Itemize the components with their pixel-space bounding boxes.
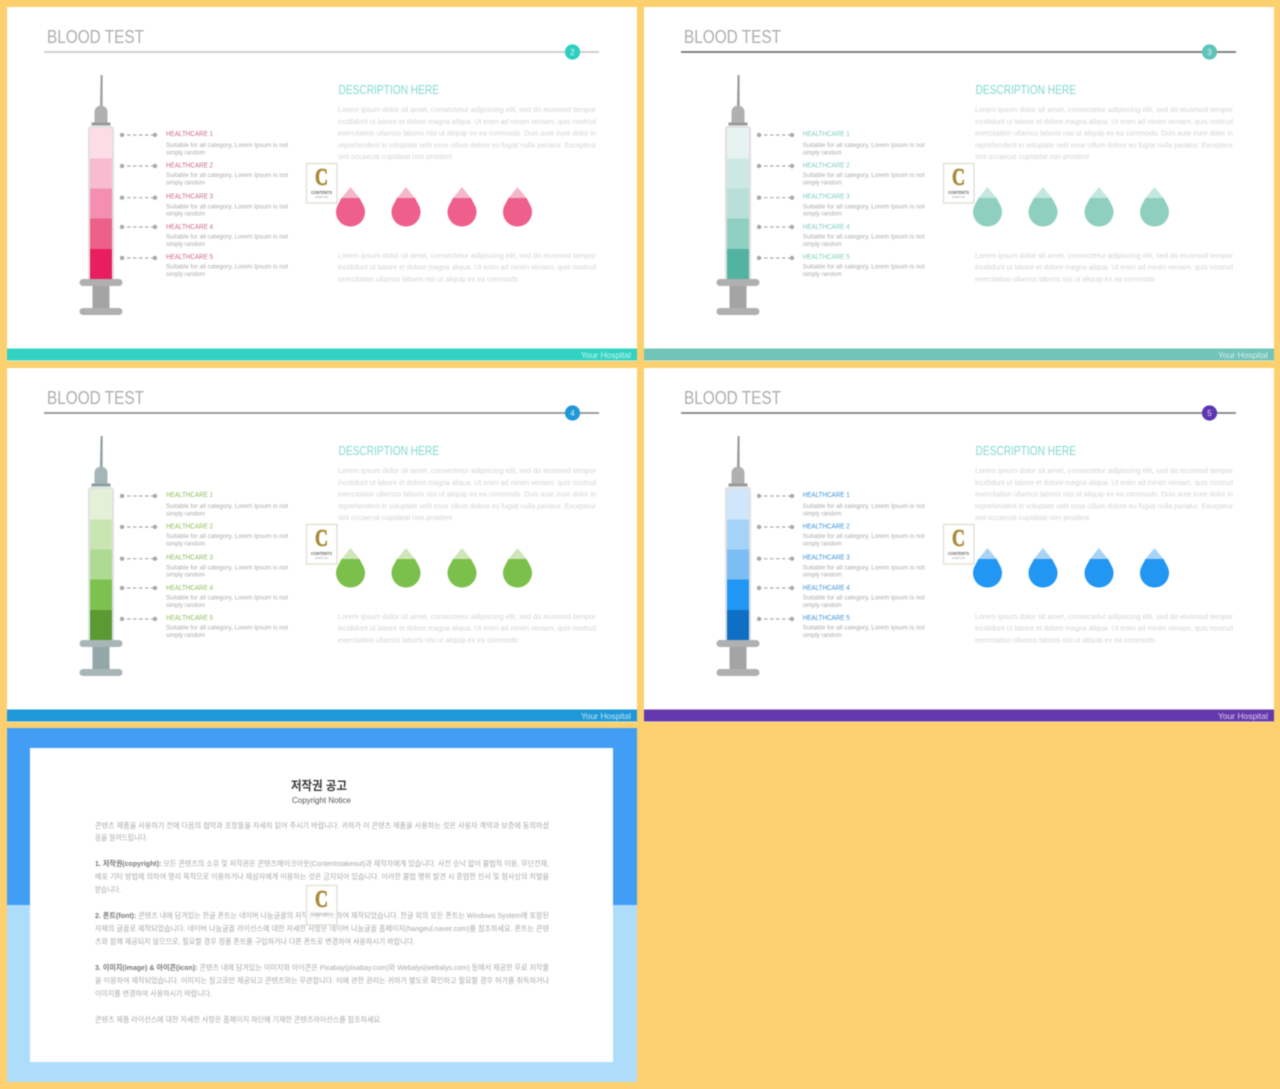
- text block: upper paragraph: incididunt ut labore et dolore magna aliqua. Ut enim ad minim veniam, quis nostrud: [975, 119, 1233, 126]
- callout: healthcare 2: [120, 524, 288, 548]
- footer bar: [644, 710, 1274, 722]
- callout: healthcare 2: HEALTHCARE 2: [803, 524, 850, 530]
- text block: upper paragraph: Lorem ipsum dolor sit amet, consectetur adipiscing elit, sed do eiusmod tempor: [338, 468, 597, 475]
- logo: contents: [306, 886, 337, 925]
- text block: clause 2: 자체의 글꼴로 제작되었습니다. 네이버 나눔글꼴 라이선스에 대한 자세한 사항은 네이버 나눔글꼴 홈페이지(hangeul.naver.com)를 참조하세요. 폰트는 콘텐: [95, 923, 549, 933]
- logo: contents: [306, 164, 337, 203]
- text block: upper paragraph: Lorem ipsum dolor sit amet, consectetur adipiscing elit, sed do eiusmod tempor: [338, 107, 597, 114]
- callout: healthcare 5: [757, 615, 925, 639]
- text block: upper paragraph: [338, 468, 597, 522]
- text block: lower paragraph: Lorem ipsum dolor sit amet, consectetur adipiscing elit, sed do eiusmod tempor: [975, 253, 1234, 260]
- callout: healthcare 2: [757, 162, 925, 186]
- text block: clause 3: 이미지를 변경하여 사용하시기 바랍니다.: [95, 988, 212, 998]
- callout: healthcare 1: Suitable for all category, Lorem Ipsum is not: [803, 504, 925, 510]
- callout: healthcare 3: simply random: [803, 572, 842, 578]
- callout: healthcare 1: HEALTHCARE 1: [166, 492, 213, 499]
- text block: intro: 콘텐츠 제품을 사용하기 전에 다음의 협약과 조항들을 자세히 읽어 주시기 바랍니다. 귀하가 이 콘텐츠 제품을 사용하는 것은 사용자 계약과 보증에 동의하셨: [95, 820, 549, 830]
- page number badge: [565, 44, 580, 60]
- panel: slide 5 blue: [644, 368, 1274, 722]
- callout: healthcare 1: Suitable for all category, Lorem Ipsum is not: [166, 504, 288, 510]
- icons: blood drops: [973, 548, 1169, 587]
- logo: contents: C: [952, 526, 965, 552]
- callout: healthcare 2: simply random: [803, 542, 842, 548]
- callout: healthcare 4: HEALTHCARE 4: [803, 224, 850, 231]
- callout: healthcare 3: Suitable for all category, Lorem Ipsum is not: [803, 566, 925, 572]
- callout: healthcare 5: HEALTHCARE 5: [166, 615, 213, 622]
- callout: healthcare 1: [120, 131, 288, 156]
- text block: lower paragraph: exercitation ullamco laboris nisi ut aliquip ex ea commodo: [338, 277, 518, 284]
- page number badge: 2: [570, 48, 575, 57]
- text block: clause 3: 을 이용하여 제작되었습니다. 이미지는 참고로만 제공되고 콘텐츠와는 무관합니다. 이에 관한 권리는 귀하가 별도로 확인하고 필요할 경우 허가를 취득하거나: [95, 975, 549, 985]
- text block: lower paragraph: [975, 253, 1234, 284]
- page number badge: 4: [570, 409, 575, 418]
- logo: contents: CONTENTS: [311, 551, 332, 556]
- page number badge: 5: [1207, 409, 1212, 418]
- callout: healthcare 5: simply random: [803, 272, 842, 278]
- callout: healthcare 3: [757, 554, 925, 578]
- logo: contents: CONTENTS: [311, 912, 332, 917]
- callout: healthcare 5: [120, 254, 288, 278]
- text block: upper paragraph: exercitation ullamco laboris nisi ut aliquip ex ea commodo. Duis aute irure dolor in: [338, 131, 596, 138]
- heading: blood test: BLOOD TEST: [684, 388, 781, 408]
- footer bar: Your Hospital: [1218, 711, 1268, 721]
- callout: healthcare 3: Suitable for all category, Lorem Ipsum is not: [166, 566, 288, 572]
- text block: lower paragraph: [338, 614, 597, 645]
- heading: blood test: BLOOD TEST: [47, 27, 144, 47]
- callout: healthcare 5: simply random: [166, 272, 205, 278]
- text block: lower paragraph: [975, 614, 1234, 645]
- text block: clause 3: 3. 이미지(image) & 아이콘(icon): 콘텐츠 내에 담겨있는 이미지와 아이콘은 Pixabay(pixabay.com)와 Webalys(webalys.com) 등에서 제공한 무료 저작물: [95, 962, 549, 972]
- callout: healthcare 4: Suitable for all category, Lorem Ipsum is not: [803, 235, 925, 241]
- text block: clause 2: 츠와 함께 제공되지 않으므로, 필요할 경우 정품 폰트를 구입하거나 다른 폰트로 변경하여 사용하시기 바랍니다.: [95, 936, 415, 946]
- icon: syringe: [716, 436, 760, 676]
- callout: healthcare 5: HEALTHCARE 5: [166, 254, 213, 261]
- text block: lower paragraph: exercitation ullamco laboris nisi ut aliquip ex ea commodo: [975, 638, 1155, 645]
- text block: upper paragraph: sint occaecat cupidatat non proident: [975, 515, 1089, 522]
- callout: healthcare 1: [120, 492, 288, 518]
- callout: healthcare 3: [120, 194, 288, 218]
- callout: healthcare 2: HEALTHCARE 2: [166, 162, 213, 170]
- callout: healthcare 4: [757, 585, 925, 609]
- logo: contents: CONTENTS: [311, 190, 332, 195]
- callout: healthcare 4: simply random: [166, 242, 205, 248]
- text block: upper paragraph: exercitation ullamco laboris nisi ut aliquip ex ea commodo. Duis aute irure dolor in: [338, 492, 596, 499]
- callout: healthcare 5: simply random: [803, 633, 842, 639]
- callout: healthcare 2: simply random: [803, 180, 842, 186]
- logo: contents: C: [315, 526, 328, 552]
- text block: upper paragraph: exercitation ullamco laboris nisi ut aliquip ex ea commodo. Duis aute irure dolor in: [975, 492, 1233, 499]
- text block: lower paragraph: incididunt ut labore et dolore magna aliqua. Ut enim ad minim veniam, quis nostrud: [338, 265, 596, 272]
- callout: healthcare 5: Suitable for all category, Lorem Ipsum is not: [166, 626, 288, 632]
- text block: clause 2: 2. 폰트(font): 콘텐츠 내에 담겨있는 한글 폰트는 네이버 나눔글꼴의 저작권을 기초하여 제작되었습니다. 한글 외의 모든 폰트는 Windows System에 포함된: [95, 910, 549, 920]
- logo: contents: NAVER.COM: [952, 195, 966, 199]
- callout: healthcare 1: Suitable for all category, Lorem Ipsum is not: [166, 143, 288, 149]
- page number badge: [1202, 405, 1217, 421]
- text block: clause 1: 받습니다.: [95, 884, 121, 894]
- callout: healthcare 5: Suitable for all category, Lorem Ipsum is not: [803, 265, 925, 271]
- callout: healthcare 5: [120, 615, 288, 639]
- logo: contents: C: [315, 887, 328, 913]
- heading: description: DESCRIPTION HERE: [976, 83, 1076, 97]
- logo: contents: NAVER.COM: [315, 556, 329, 560]
- text block: upper paragraph: reprehenderit in voluptate velit esse cillum dolore eu fugiat nulla pariatur. Excepteur: [975, 143, 1234, 150]
- callout: healthcare 2: Suitable for all category, Lorem Ipsum is not: [803, 534, 925, 540]
- text block: clause 1: 1. 저작권(copyright): 모든 콘텐츠의 소유 및 저작권은 콘텐츠메이크아웃(Contentstakeout)과 제작자에게 있습니다. 사전 승낙 없이 불법적 이용, 무단전재,: [95, 858, 549, 868]
- text block: lower paragraph: incididunt ut labore et dolore magna aliqua. Ut enim ad minim veniam, quis nostrud: [975, 626, 1233, 633]
- callout: healthcare 1: simply random: [166, 512, 205, 518]
- callout: healthcare 1: simply random: [166, 150, 205, 156]
- callout: healthcare 4: Suitable for all category, Lorem Ipsum is not: [803, 596, 925, 602]
- text block: lower paragraph: incididunt ut labore et dolore magna aliqua. Ut enim ad minim veniam, quis nostrud: [338, 626, 596, 633]
- footer bar: [7, 348, 637, 360]
- callout: healthcare 2: [757, 524, 925, 548]
- text block: upper paragraph: [975, 468, 1234, 522]
- callout: healthcare 5: Suitable for all category, Lorem Ipsum is not: [166, 265, 288, 271]
- callout: healthcare 2: simply random: [166, 542, 205, 548]
- callout: healthcare 3: HEALTHCARE 3: [166, 194, 213, 200]
- logo: contents: NAVER.COM: [315, 195, 329, 199]
- footer bar: [7, 710, 637, 722]
- panel: slide 2 pink: [7, 7, 637, 361]
- footer bar: Your Hospital: [581, 350, 631, 360]
- heading: description: DESCRIPTION HERE: [338, 444, 439, 458]
- callout: healthcare 1: [757, 492, 925, 518]
- logo: contents: [944, 164, 974, 203]
- text block: lower paragraph: incididunt ut labore et dolore magna aliqua. Ut enim ad minim veniam, quis nostrud: [975, 265, 1233, 272]
- text block: upper paragraph: sint occaecat cupidatat non proident: [338, 154, 452, 161]
- page number badge: [565, 405, 580, 421]
- callout: healthcare 5: [757, 254, 925, 278]
- logo: contents: [944, 524, 974, 564]
- text block: clause 1: [95, 858, 549, 894]
- text block: lower paragraph: Lorem ipsum dolor sit amet, consectetur adipiscing elit, sed do eiusmod tempor: [975, 614, 1234, 621]
- panel: slide 4 green: [7, 368, 637, 722]
- callout: healthcare 2: HEALTHCARE 2: [803, 162, 850, 170]
- callout: healthcare 3: HEALTHCARE 3: [803, 554, 850, 562]
- callout: healthcare 1: Suitable for all category, Lorem Ipsum is not: [803, 143, 925, 149]
- text block: closing note: 콘텐츠 제품 라이선스에 대한 자세한 사항은 홈페이지 하단에 기재한 콘텐츠라이선스를 참조하세요.: [95, 1014, 382, 1024]
- text block: clause 3: [95, 962, 549, 998]
- logo: contents: NAVER.COM: [952, 556, 966, 560]
- callout: healthcare 3: HEALTHCARE 3: [803, 194, 850, 200]
- text block: upper paragraph: [338, 107, 597, 161]
- callout: healthcare 3: Suitable for all category, Lorem Ipsum is not: [166, 205, 288, 211]
- callout: healthcare 1: [757, 131, 925, 156]
- panel: slide 3 teal: [644, 7, 1274, 361]
- text block: upper paragraph: Lorem ipsum dolor sit amet, consectetur adipiscing elit, sed do eiusmod tempor: [975, 107, 1234, 114]
- heading: copyright title: 저작권 공고: [291, 778, 347, 793]
- callout: healthcare 2: HEALTHCARE 2: [166, 524, 213, 530]
- callout: healthcare 4: HEALTHCARE 4: [166, 585, 213, 592]
- text block: clause 2: [95, 910, 549, 946]
- text block: intro: 음을 알려드립니다.: [95, 832, 148, 842]
- logo: contents: C: [315, 165, 328, 191]
- text block: lower paragraph: [338, 253, 597, 284]
- icons: blood drops: [336, 548, 532, 587]
- callout: healthcare 3: simply random: [166, 212, 205, 218]
- callout: healthcare 4: [757, 224, 925, 248]
- callout: healthcare 4: simply random: [803, 242, 842, 248]
- heading: blood test: BLOOD TEST: [47, 388, 144, 408]
- logo: contents: [306, 524, 337, 564]
- callout: healthcare 1: simply random: [803, 512, 842, 518]
- callout: healthcare 4: simply random: [803, 603, 842, 609]
- callout: healthcare 3: simply random: [166, 572, 205, 578]
- text block: upper paragraph: reprehenderit in voluptate velit esse cillum dolore eu fugiat nulla pariatur. Excepteur: [975, 504, 1234, 511]
- callout: healthcare 5: HEALTHCARE 5: [803, 615, 850, 622]
- text block: upper paragraph: incididunt ut labore et dolore magna aliqua. Ut enim ad minim veniam, quis nostrud: [338, 119, 596, 126]
- callout: healthcare 5: Suitable for all category, Lorem Ipsum is not: [803, 626, 925, 632]
- callout: healthcare 3: HEALTHCARE 3: [166, 554, 213, 562]
- text block: intro: [95, 820, 549, 842]
- text block: upper paragraph: reprehenderit in voluptate velit esse cillum dolore eu fugiat nulla pariatur. Excepteur: [338, 143, 597, 150]
- heading: description: DESCRIPTION HERE: [976, 444, 1076, 458]
- page number badge: [1202, 44, 1217, 60]
- callout: healthcare 2: Suitable for all category, Lorem Ipsum is not: [803, 173, 925, 179]
- text block: upper paragraph: [975, 107, 1234, 161]
- logo: contents: C: [952, 165, 965, 191]
- icon: syringe: [80, 75, 122, 315]
- callout: healthcare 3: [120, 554, 288, 578]
- subheading: copyright notice: Copyright Notice: [292, 795, 351, 805]
- text block: upper paragraph: exercitation ullamco laboris nisi ut aliquip ex ea commodo. Duis aute irure dolor in: [975, 131, 1233, 138]
- callout: healthcare 4: Suitable for all category, Lorem Ipsum is not: [166, 235, 288, 241]
- icons: blood drops: [336, 187, 532, 226]
- callout: healthcare 4: Suitable for all category, Lorem Ipsum is not: [166, 596, 288, 602]
- icons: blood drops: [973, 187, 1169, 226]
- callout: healthcare 5: simply random: [166, 633, 205, 639]
- footer bar: Your Hospital: [1218, 350, 1268, 360]
- callout: healthcare 2: simply random: [166, 180, 205, 186]
- callout: healthcare 3: simply random: [803, 212, 842, 218]
- icon: syringe: [80, 436, 122, 676]
- callout: healthcare 1: HEALTHCARE 1: [166, 131, 213, 138]
- callout: healthcare 1: simply random: [803, 150, 842, 156]
- callout: healthcare 1: HEALTHCARE 1: [803, 492, 850, 499]
- callout: healthcare 4: [120, 585, 288, 609]
- callout: healthcare 3: [757, 194, 925, 218]
- callout: healthcare 4: HEALTHCARE 4: [803, 585, 850, 592]
- logo: contents: CONTENTS: [948, 190, 969, 195]
- text block: lower paragraph: Lorem ipsum dolor sit amet, consectetur adipiscing elit, sed do eiusmod tempor: [338, 253, 597, 260]
- text block: upper paragraph: incididunt ut labore et dolore magna aliqua. Ut enim ad minim veniam, quis nostrud: [338, 480, 596, 487]
- panel: copyright notice: [7, 728, 637, 1082]
- text block: upper paragraph: sint occaecat cupidatat non proident: [338, 515, 452, 522]
- heading: blood test: BLOOD TEST: [684, 27, 781, 47]
- callout: healthcare 2: Suitable for all category, Lorem Ipsum is not: [166, 173, 288, 179]
- callout: healthcare 5: HEALTHCARE 5: [803, 254, 850, 261]
- callout: healthcare 4: HEALTHCARE 4: [166, 224, 213, 231]
- callout: healthcare 3: Suitable for all category, Lorem Ipsum is not: [803, 205, 925, 211]
- callout: healthcare 2: [120, 162, 288, 186]
- icon: syringe: [716, 75, 760, 315]
- heading: description: DESCRIPTION HERE: [338, 83, 439, 97]
- text block: upper paragraph: Lorem ipsum dolor sit amet, consectetur adipiscing elit, sed do eiusmod tempor: [975, 468, 1234, 475]
- text block: upper paragraph: sint occaecat cupidatat non proident: [975, 154, 1089, 161]
- page number badge: 3: [1207, 48, 1212, 57]
- text block: clause 1: 배포 기타 방법에 의하여 영리 목적으로 이용하거나 제삼자에게 이용하는 것은 금지되어 있습니다. 이러한 불법 행위 발견 시 준엄한 민사 및 형사상의 처벌을: [95, 871, 549, 881]
- logo: contents: CONTENTS: [948, 551, 969, 556]
- text block: upper paragraph: incididunt ut labore et dolore magna aliqua. Ut enim ad minim veniam, quis nostrud: [975, 480, 1233, 487]
- callout: healthcare 4: simply random: [166, 603, 205, 609]
- text block: lower paragraph: exercitation ullamco laboris nisi ut aliquip ex ea commodo: [975, 277, 1155, 284]
- footer bar: Your Hospital: [581, 711, 631, 721]
- text block: lower paragraph: Lorem ipsum dolor sit amet, consectetur adipiscing elit, sed do eiusmod tempor: [338, 614, 597, 621]
- callout: healthcare 4: [120, 224, 288, 248]
- callout: healthcare 2: Suitable for all category, Lorem Ipsum is not: [166, 534, 288, 540]
- callout: healthcare 1: HEALTHCARE 1: [803, 131, 850, 138]
- text block: upper paragraph: reprehenderit in voluptate velit esse cillum dolore eu fugiat nulla pariatur. Excepteur: [338, 504, 597, 511]
- footer bar: [644, 348, 1274, 360]
- text block: lower paragraph: exercitation ullamco laboris nisi ut aliquip ex ea commodo: [338, 638, 518, 645]
